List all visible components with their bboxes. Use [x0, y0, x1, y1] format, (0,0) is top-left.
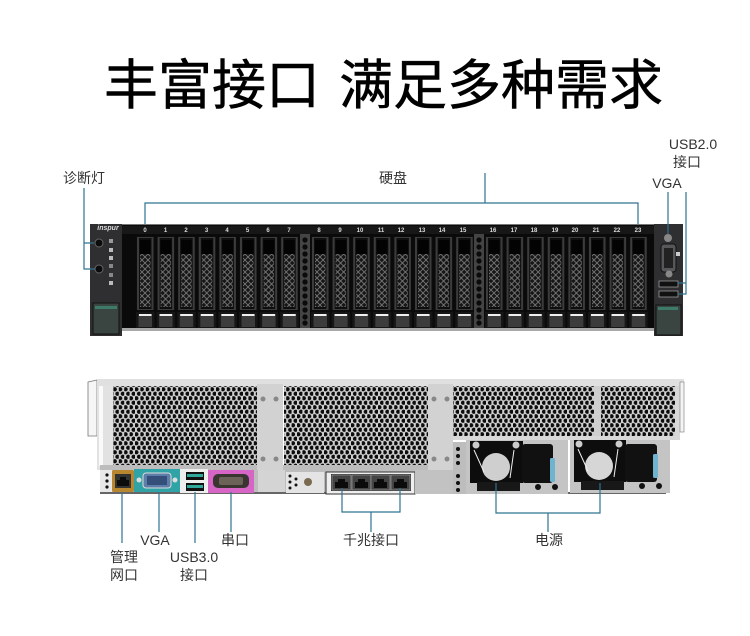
drive bays 8 to 15: 12: [398, 228, 405, 234]
label: 千兆接口 with bracket: [342, 488, 400, 548]
title: [104, 56, 663, 116]
drive bays 0 to 7: 1: [164, 228, 168, 234]
title: 满足多种需求: [339, 56, 663, 116]
drive cage: [122, 224, 654, 331]
drive bays 8 to 15: 9: [338, 228, 342, 234]
management network port: [112, 470, 134, 492]
rear VGA port: [134, 469, 180, 492]
label: 硬盘 with bracket: 硬盘: [379, 170, 407, 186]
drive bays 16 to 23: [485, 228, 648, 328]
label: 电源 with bracket: [496, 483, 600, 548]
drive bays 8 to 15: 14: [439, 228, 446, 234]
drive bays 16 to 23: 23: [635, 228, 642, 234]
perforated panel 4: [601, 386, 675, 436]
psu plate: [415, 442, 466, 494]
label: USB2.0 接口: USB2.0: [669, 136, 717, 152]
serial port: [208, 470, 254, 493]
power supply 2: [570, 440, 670, 493]
drive bays 16 to 23: 16: [490, 228, 497, 234]
label: 管理网口: [110, 492, 138, 583]
label: USB3.0 接口: USB3.0: [170, 549, 218, 565]
drive bays 8 to 15: 13: [419, 228, 426, 234]
bracket 2: [428, 384, 453, 470]
label: 管理网口: 网口: [110, 567, 138, 583]
label: 诊断灯: 诊断灯: [63, 170, 105, 186]
drive bays 0 to 7: [136, 228, 299, 328]
bracket 1: [257, 384, 283, 470]
label: USB3.0 接口: 接口: [180, 567, 208, 583]
separator: [474, 234, 484, 328]
label: 管理网口: 管理: [110, 549, 138, 565]
rear server panel: [88, 379, 684, 494]
label: USB2.0 接口: [669, 136, 717, 294]
left ear with power and status controls: inspur: [97, 225, 120, 232]
drive bays 0 to 7: 4: [225, 228, 229, 234]
label: front VGA: [652, 175, 682, 234]
rear chassis: [88, 379, 684, 494]
label: USB3.0 接口: [170, 492, 218, 583]
drive bays 0 to 7: 5: [246, 228, 250, 234]
perforated panel 3: [453, 386, 594, 436]
USB 3.0 ports: [180, 469, 208, 493]
drive bays 8 to 15: [311, 228, 474, 328]
power supply 1: [466, 440, 568, 494]
drive bays 8 to 15: 8: [317, 228, 321, 234]
label: USB2.0 接口: 接口: [673, 154, 701, 170]
drive bays 16 to 23: 17: [511, 228, 518, 234]
drive bays 8 to 15: 15: [460, 228, 467, 234]
drive bays 16 to 23: 22: [614, 228, 621, 234]
title: 丰富接口: [104, 56, 320, 116]
label: 千兆接口 with bracket: 千兆接口: [343, 532, 399, 548]
label: front VGA: VGA: [652, 175, 682, 191]
drive bays 16 to 23: 21: [593, 228, 600, 234]
label: 硬盘 with bracket: [145, 170, 638, 224]
drive bays 16 to 23: 18: [531, 228, 538, 234]
perforated panel 1: [113, 386, 257, 465]
drive bays 0 to 7: 7: [287, 228, 291, 234]
perforated panel 2: [284, 386, 428, 465]
drive bays 8 to 15: 10: [357, 228, 364, 234]
label: 电源 with bracket: 电源: [535, 532, 563, 548]
drive bays 16 to 23: 19: [552, 228, 559, 234]
drive bays 8 to 15: 11: [378, 228, 385, 234]
label: rear VGA: VGA: [140, 532, 170, 548]
label: 串口: 串口: [221, 532, 249, 548]
label: 串口: [221, 492, 249, 548]
left ear with power and status controls: [90, 224, 122, 336]
gigabit network ports: [326, 472, 415, 494]
label: 诊断灯: [63, 170, 105, 269]
front server panel: [90, 224, 683, 336]
label: rear VGA: [140, 492, 170, 548]
drive bays 0 to 7: 0: [143, 228, 147, 234]
small rear plate: [258, 470, 324, 493]
drive bays 0 to 7: 2: [184, 228, 188, 234]
right ear with VGA and USB: [654, 224, 683, 336]
separator: [300, 234, 310, 328]
drive bays 0 to 7: 3: [205, 228, 209, 234]
drive bays 16 to 23: 20: [572, 228, 579, 234]
drive bays 0 to 7: 6: [266, 228, 270, 234]
